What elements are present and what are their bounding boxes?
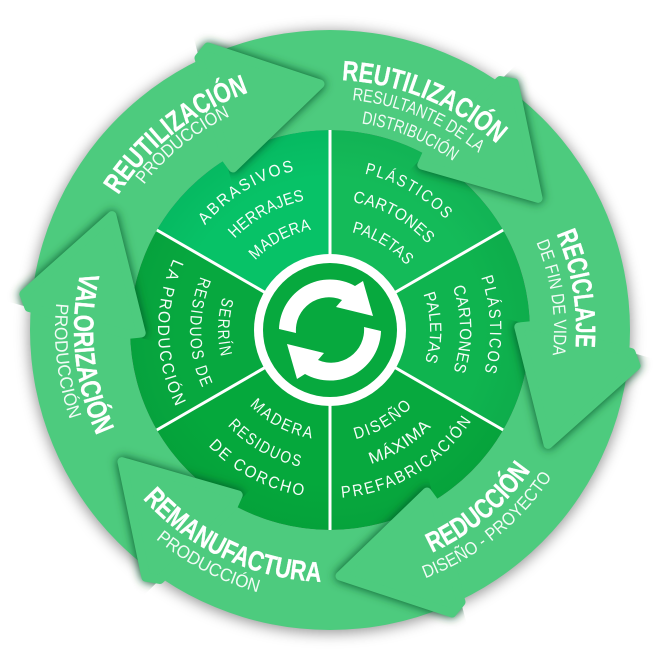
arrow: Reutilización producción xyxy=(102,35,330,194)
sector: top right xyxy=(330,130,503,330)
title: Valorización: VALORIZACIÓN xyxy=(74,276,114,434)
text: top right sector: PLÁSTICOS xyxy=(366,162,452,218)
arrow: Reciclaje xyxy=(509,228,648,454)
text: bottom left sector: RESIDUOS xyxy=(228,418,301,466)
sector: left xyxy=(130,230,330,430)
subtitle: producción: PRODUCCIÓN xyxy=(156,530,260,592)
text: left sector: LA PRODUCCIÓN xyxy=(158,260,186,406)
text: bottom left sector: MADERA xyxy=(250,398,312,438)
text: bottom right sector: MÁXIMA xyxy=(368,422,432,464)
sector: bottom left xyxy=(157,330,330,530)
hub: recycle icon xyxy=(254,254,406,406)
title: Remanufactura: REMANUFACTURA xyxy=(144,486,320,582)
subtitle: diseño proyecto: DISEÑO - PROYECTO xyxy=(422,472,550,578)
arrow: Reutilización resultante de la distribución xyxy=(343,60,549,209)
title: Reutilización: REUTILIZACIÓN xyxy=(343,60,508,143)
text: bottom left sector xyxy=(209,398,312,495)
icon: upper arrow xyxy=(279,279,373,333)
text: top left sector xyxy=(200,160,312,260)
title: Reciclaje: RECICLAJE xyxy=(556,228,596,347)
sector: right xyxy=(330,230,530,430)
arrow: Remanufactura xyxy=(111,451,320,592)
text: bottom right sector: PREFABRICACIÓN xyxy=(342,416,471,498)
text: top left sector: HERRAJES xyxy=(228,190,304,238)
text: top right sector xyxy=(353,162,452,264)
subtitle: producción: PRODUCCIÓN xyxy=(54,304,82,418)
text: top left sector: MADERA xyxy=(248,220,312,260)
text: right sector xyxy=(424,275,502,374)
subtitle: distribución: DISTRIBUCIÓN xyxy=(362,111,460,160)
sector: bottom right xyxy=(330,330,503,530)
text: right sector: PALETAS xyxy=(424,292,442,363)
text: right sector: PLÁSTICOS xyxy=(482,275,502,374)
subtitle: resultante de la: RESULTANTE DE LA xyxy=(353,88,484,153)
arrow: Reducción xyxy=(330,460,550,625)
subtitle: producción: PRODUCCIÓN xyxy=(135,106,229,184)
text: left sector: RESIDUOS DE xyxy=(190,278,212,387)
text: left sector xyxy=(158,260,234,406)
icon: lower arrow xyxy=(287,327,381,381)
text: top right sector: CARTONES xyxy=(354,192,434,242)
subtitle: de fin de vida: DE FIN DE VIDA xyxy=(536,239,566,356)
text: bottom left sector: DE CORCHO xyxy=(209,438,304,495)
arrow: Valorización xyxy=(12,206,151,434)
text: left sector: SERRÍN xyxy=(218,298,234,356)
text: top left sector: ABRASIVOS xyxy=(200,160,293,226)
text: top right sector: PALETAS xyxy=(353,222,414,264)
text: right sector: CARTONES xyxy=(454,286,472,373)
title: Reutilización: REUTILIZACIÓN xyxy=(102,74,248,194)
text: bottom right sector: DISEÑO xyxy=(354,400,410,439)
central disc with six sectors xyxy=(130,130,530,530)
title: Reducción: REDUCCIÓN xyxy=(424,460,530,552)
sector: top left xyxy=(157,130,330,330)
